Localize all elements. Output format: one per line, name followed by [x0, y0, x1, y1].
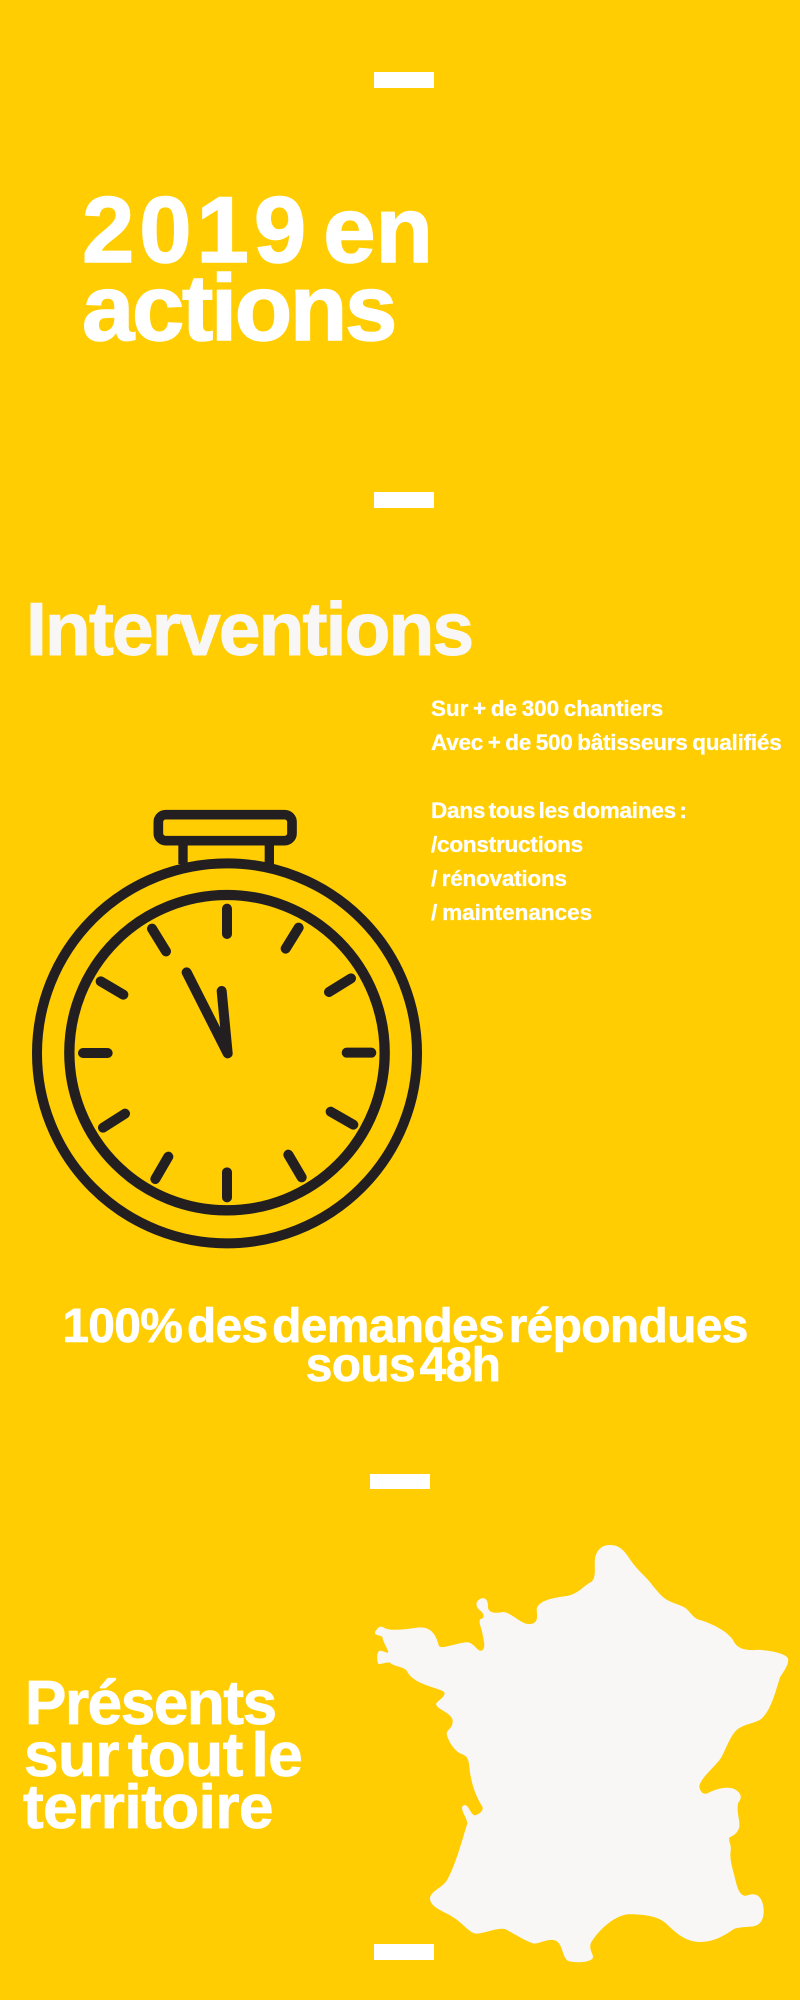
divider bar: top — [374, 72, 434, 88]
icon: stopwatch — [32, 810, 422, 1248]
divider bar: interventions — [374, 492, 434, 508]
title: actions — [82, 255, 395, 360]
stopwatch neck — [183, 845, 269, 864]
text block: intervention details: Avec + de 500 bâtisseurs qualifiés — [431, 730, 782, 755]
statistic: response time: 100% des demandes répondues — [62, 1300, 748, 1353]
stopwatch outer ring — [37, 863, 417, 1243]
text block: intervention details: Dans tous les domaines : — [431, 798, 687, 823]
stopwatch hands — [187, 972, 228, 1053]
heading: present across the territory: sur tout le — [24, 1721, 302, 1790]
divider bar: territory — [370, 1474, 430, 1489]
divider bar: bottom — [374, 1944, 434, 1960]
statistic: response time: sous 48h — [306, 1339, 500, 1392]
title: 2019 en — [82, 177, 433, 282]
heading: interventions: Interventions — [26, 587, 472, 671]
heading: present across the territory: territoire — [23, 1773, 273, 1842]
stopwatch top button — [158, 815, 292, 841]
text block: intervention details — [431, 696, 782, 925]
text block: intervention details: / maintenances — [431, 900, 592, 925]
title — [82, 177, 433, 360]
stopwatch inner ring — [69, 895, 385, 1210]
text block: intervention details: /constructions — [431, 832, 583, 857]
text block: intervention details: Sur + de 300 chantiers — [431, 696, 663, 721]
stopwatch hour ticks — [83, 909, 371, 1197]
text block: intervention details: / rénovations — [431, 866, 567, 891]
heading: present across the territory: Présents — [25, 1669, 276, 1738]
heading: present across the territory — [23, 1669, 302, 1842]
map: France — [374, 1545, 788, 1962]
statistic: response time — [62, 1300, 748, 1392]
